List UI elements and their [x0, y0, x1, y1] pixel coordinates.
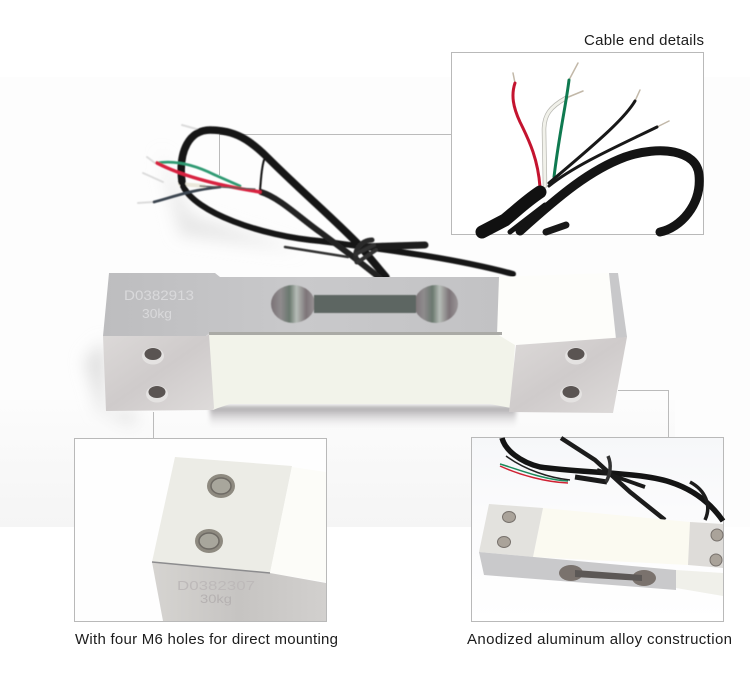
- front metal face: [152, 562, 326, 621]
- black cable loop: [520, 151, 699, 232]
- black cable: upper loop: [181, 130, 386, 277]
- top aluminum face: [103, 273, 502, 336]
- bar shadow: [85, 150, 516, 430]
- cable stub: [546, 225, 566, 232]
- threaded holes: [142, 348, 587, 402]
- left front face: [103, 334, 214, 411]
- colored wires: [157, 162, 240, 186]
- front metal face: [479, 552, 676, 590]
- front white label: [676, 570, 723, 596]
- white label: [270, 467, 326, 582]
- black cable: lower loop: [183, 186, 513, 274]
- engraved text: D0382307: [177, 578, 255, 593]
- engraved serial: D0382913: [124, 287, 194, 303]
- end strip: [609, 273, 627, 339]
- right front face: [509, 337, 627, 413]
- right grey block: [688, 522, 723, 568]
- end top face: [479, 504, 543, 557]
- caption: cable end details: Cable end details: [584, 32, 704, 49]
- load cell bar: [103, 273, 627, 413]
- main photo background: [0, 77, 750, 527]
- cable stub: [360, 245, 425, 247]
- through slot: [271, 285, 458, 323]
- cables: [500, 438, 723, 521]
- slot: [559, 565, 656, 586]
- panel: anodized construction: [472, 438, 724, 622]
- top metal face: [152, 457, 292, 573]
- tie knot: [356, 240, 372, 262]
- white front label: [209, 334, 515, 410]
- cable bundle: [138, 125, 513, 278]
- holes: [498, 512, 723, 566]
- threaded holes: [195, 474, 235, 553]
- sheath: [482, 192, 540, 232]
- panel: cable end details: [452, 52, 704, 234]
- callout line: cable end details: [220, 134, 451, 175]
- panel: four M6 holes: 30kg: [200, 592, 232, 606]
- white top label: [533, 508, 723, 566]
- white top label: [497, 273, 616, 345]
- wire bundle: [482, 63, 699, 232]
- thin connecting wire: [260, 160, 264, 190]
- black cable: sheath: [261, 192, 380, 278]
- caption: anodized construction: Anodized aluminum alloy construction: [467, 631, 732, 648]
- sensor wire tips: [138, 125, 204, 203]
- load cell bar: 30kg: [142, 306, 172, 321]
- caption: four M6 holes: With four M6 holes for direct mounting: [75, 631, 338, 648]
- callout lines: mounting and alloy: [154, 390, 668, 438]
- panel: four M6 holes: [74, 438, 326, 622]
